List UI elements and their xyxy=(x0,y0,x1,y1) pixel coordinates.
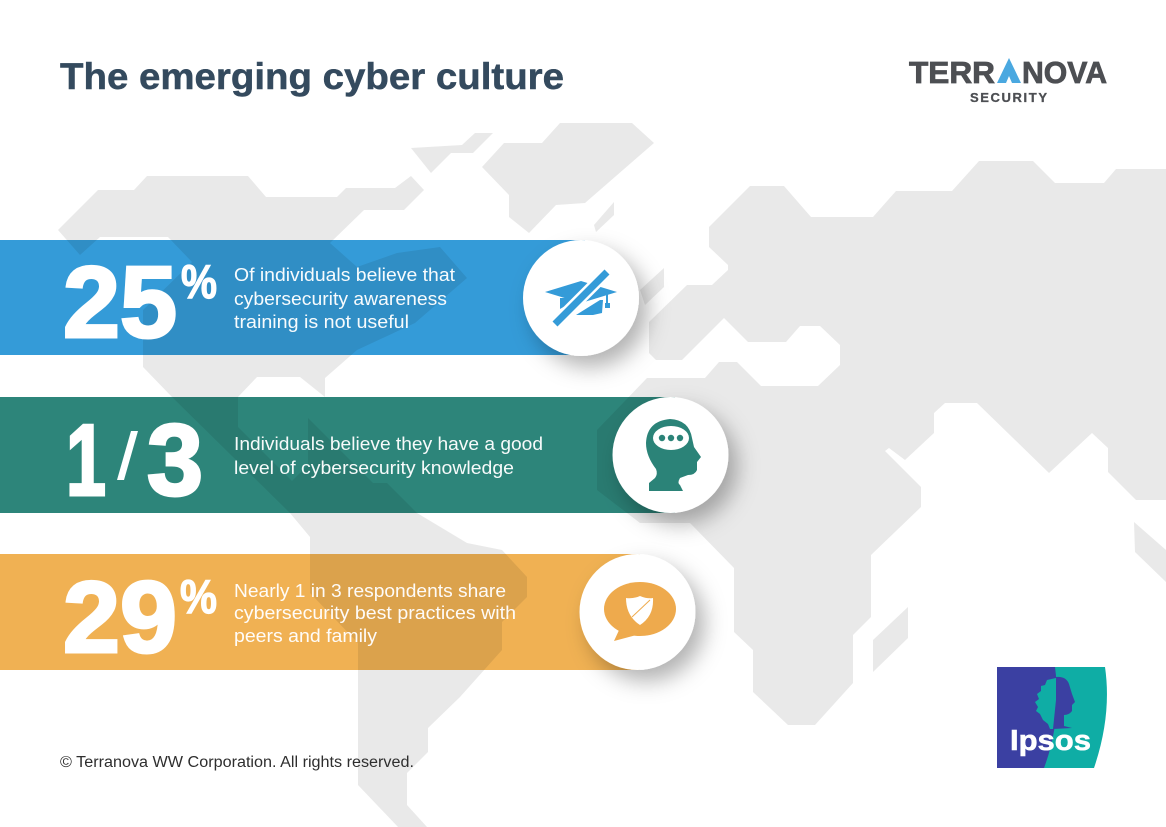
stat: 25%: 25 xyxy=(63,247,177,359)
panel: one third xyxy=(0,397,728,517)
panel: 29 percent xyxy=(0,554,696,674)
text: training not useful: Of individuals believe that xyxy=(234,265,455,285)
stat: 1/3 xyxy=(66,405,203,517)
stat: 29%: % xyxy=(180,570,217,623)
icon circle: head with speech bubble xyxy=(612,397,728,513)
logo: Terranova Security: SECURITY xyxy=(970,90,1047,105)
stat: 29%: 29 xyxy=(63,562,177,674)
map: Australasia fragment xyxy=(1134,522,1166,582)
text: share best practices: cybersecurity best practices with xyxy=(234,603,516,623)
map: Madagascar xyxy=(873,607,908,672)
icon circle: graduation cap crossed out xyxy=(523,240,639,356)
copyright: © Terranova WW Corporation. All rights reserved. xyxy=(60,754,414,771)
text: good level of knowledge xyxy=(234,434,543,478)
map: Americas xyxy=(58,176,527,827)
icon circle: speech bubble with shield xyxy=(580,554,696,670)
text: training not useful xyxy=(234,265,455,332)
text: share best practices xyxy=(234,581,516,646)
title: The emerging cyber culture xyxy=(60,56,564,97)
map: British Isles xyxy=(640,268,664,305)
text: share best practices: Nearly 1 in 3 respondents share xyxy=(234,581,506,601)
logo: blue triangle A xyxy=(997,58,1021,83)
logo: tree silhouette xyxy=(1035,678,1056,729)
text: training not useful: cybersecurity awareness xyxy=(234,289,447,309)
text: training not useful: training is not useful xyxy=(234,312,409,332)
map: Arctic island xyxy=(411,133,493,173)
logo: Terranova Security: NOVA xyxy=(1022,55,1107,90)
text: share best practices: peers and family xyxy=(234,626,377,646)
map: Eurasia and Africa xyxy=(597,161,1166,725)
logo: Ipsos xyxy=(997,667,1107,768)
panel: 25 percent xyxy=(0,240,639,359)
text: good level of knowledge: level of cybersecurity knowledge xyxy=(234,458,514,478)
logo: Ipsos: Ipsos xyxy=(1010,725,1091,757)
logo: Terranova Security: TERR xyxy=(909,55,995,90)
map: Iceland xyxy=(594,202,614,232)
text: good level of knowledge: Individuals believe they have a good xyxy=(234,434,543,454)
logo: Terranova Security xyxy=(909,55,1107,105)
stat: 1/3: 1 xyxy=(66,405,106,517)
map: Greenland xyxy=(482,123,654,233)
logo: head silhouette xyxy=(1053,677,1075,729)
stat: 25%: % xyxy=(181,255,217,308)
stat: 1/3: 3 xyxy=(147,405,203,517)
